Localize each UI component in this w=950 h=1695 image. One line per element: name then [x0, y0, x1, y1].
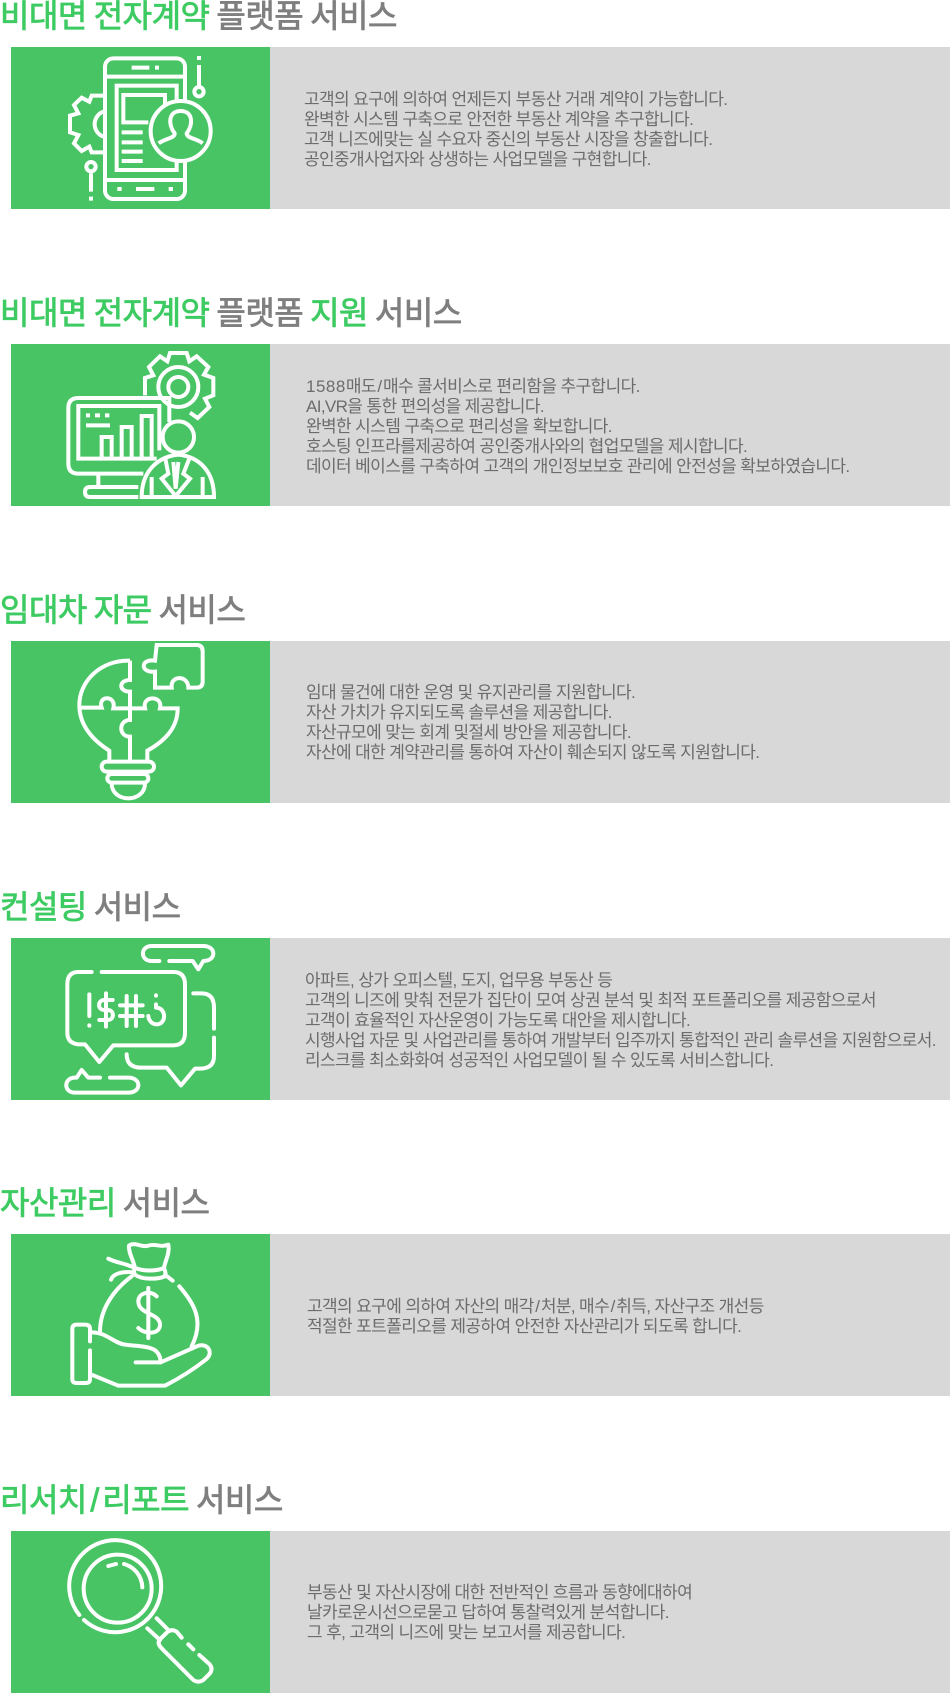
panel: lease advisory service: [11, 641, 950, 803]
description text: 그 후, 고객의 니즈에 맞는 보고서를 제공합니다.: [307, 1623, 625, 1642]
icon: smartphone with user and gear: [68, 56, 213, 201]
green icon block: [11, 641, 270, 803]
description text: 호스팅 인프라를제공하여 공인중개사와의 협업모델을 제시합니다.: [306, 437, 747, 456]
title: platform support service: 비대면 전자계약 플랫폼 지원 서비스: [0, 295, 462, 331]
description text: 완벽한 시스템 구축으로 안전한 부동산 계약을 추구합니다.: [304, 110, 693, 129]
description text: 고객 니즈에맞는 실 수요자 중신의 부동산 시장을 창출합니다.: [304, 130, 712, 149]
description text: [306, 377, 850, 476]
description text: 데이터 베이스를 구축하여 고객의 개인정보보호 관리에 안전성을 확보하였습니다.: [306, 457, 850, 476]
description text: 자산에 대한 계약관리를 통하여 자산이 훼손되지 않도록 지원합니다.: [306, 743, 759, 762]
description text: 공인중개사업자와 상생하는 사업모델을 구현합니다.: [304, 150, 651, 169]
panel: consulting service: [11, 938, 950, 1100]
panel: platform service: [11, 47, 950, 209]
description text: AI,VR을 통한 편의성을 제공합니다.: [306, 397, 544, 416]
description text: 임대 물건에 대한 운영 및 유지관리를 지원합니다.: [306, 683, 635, 702]
description text: 리스크를 최소화화여 성공적인 사업모델이 될 수 있도록 서비스합니다.: [305, 1051, 773, 1070]
title: asset management service: 자산관리 서비스: [0, 1185, 209, 1221]
description text: 아파트, 상가 오피스텔, 도지, 업무용 부동산 등: [305, 971, 612, 990]
description text: 완벽한 시스템 구축으로 편리성을 확보합니다.: [306, 417, 612, 436]
icon: hand holding money bag: [70, 1242, 212, 1388]
green icon block: [11, 938, 270, 1100]
green icon block: [11, 1531, 270, 1693]
description text: 부동산 및 자산시장에 대한 전반적인 흐름과 동향에대하여: [307, 1583, 692, 1602]
description text: 고객의 요구에 의하여 자산의 매각/처분, 매수/취득, 자산구조 개선등: [307, 1297, 764, 1316]
icon: monitor, gear and consultant: [66, 351, 216, 500]
green icon block: [11, 47, 270, 209]
title: research report service: 리서치/리포트 서비스: [0, 1482, 283, 1518]
description text: [304, 90, 727, 169]
description text: 고객의 니즈에 맞춰 전문가 집단이 모여 상권 분석 및 최적 포트폴리오를 제공함으로서: [305, 991, 876, 1010]
description text: 고객이 효율적인 자산운영이 가능도록 대안을 제시합니다.: [305, 1011, 690, 1030]
panel: asset management service: [11, 1234, 950, 1396]
title: lease advisory service: 임대차 자문 서비스: [0, 592, 245, 628]
description text: 날카로운시선으로묻고 답하여 통찰력있게 분석합니다.: [307, 1603, 669, 1622]
description text: 적절한 포트폴리오를 제공하여 안전한 자산관리가 되도록 합니다.: [307, 1317, 741, 1336]
description text: 자산규모에 맞는 회계 및절세 방안을 제공합니다.: [306, 723, 631, 742]
description text: 시행사업 자문 및 사업관리를 통하여 개발부터 입주까지 통합적인 관리 솔루션을 지원함으로서.: [305, 1031, 936, 1050]
description text: [307, 1297, 764, 1336]
panel: platform support service: [11, 344, 950, 506]
panel: research report service: [11, 1531, 950, 1693]
description text: 자산 가치가 유지되도록 솔루션을 제공합니다.: [306, 703, 612, 722]
title: consulting service: 컨설팅 서비스: [0, 889, 181, 925]
icon: speech bubbles: [64, 944, 216, 1095]
description text: 1588매도/매수 콜서비스로 편리함을 추구합니다.: [306, 377, 640, 396]
green icon block: [11, 1234, 270, 1396]
description text: 고객의 요구에 의하여 언제든지 부동산 거래 계약이 가능합니다.: [304, 90, 727, 109]
description text: [305, 971, 936, 1070]
icon: puzzle light bulb: [77, 643, 205, 800]
description text: [306, 683, 759, 762]
icon: magnifying glass: [67, 1538, 214, 1684]
description text: [307, 1583, 692, 1642]
green icon block: [11, 344, 270, 506]
